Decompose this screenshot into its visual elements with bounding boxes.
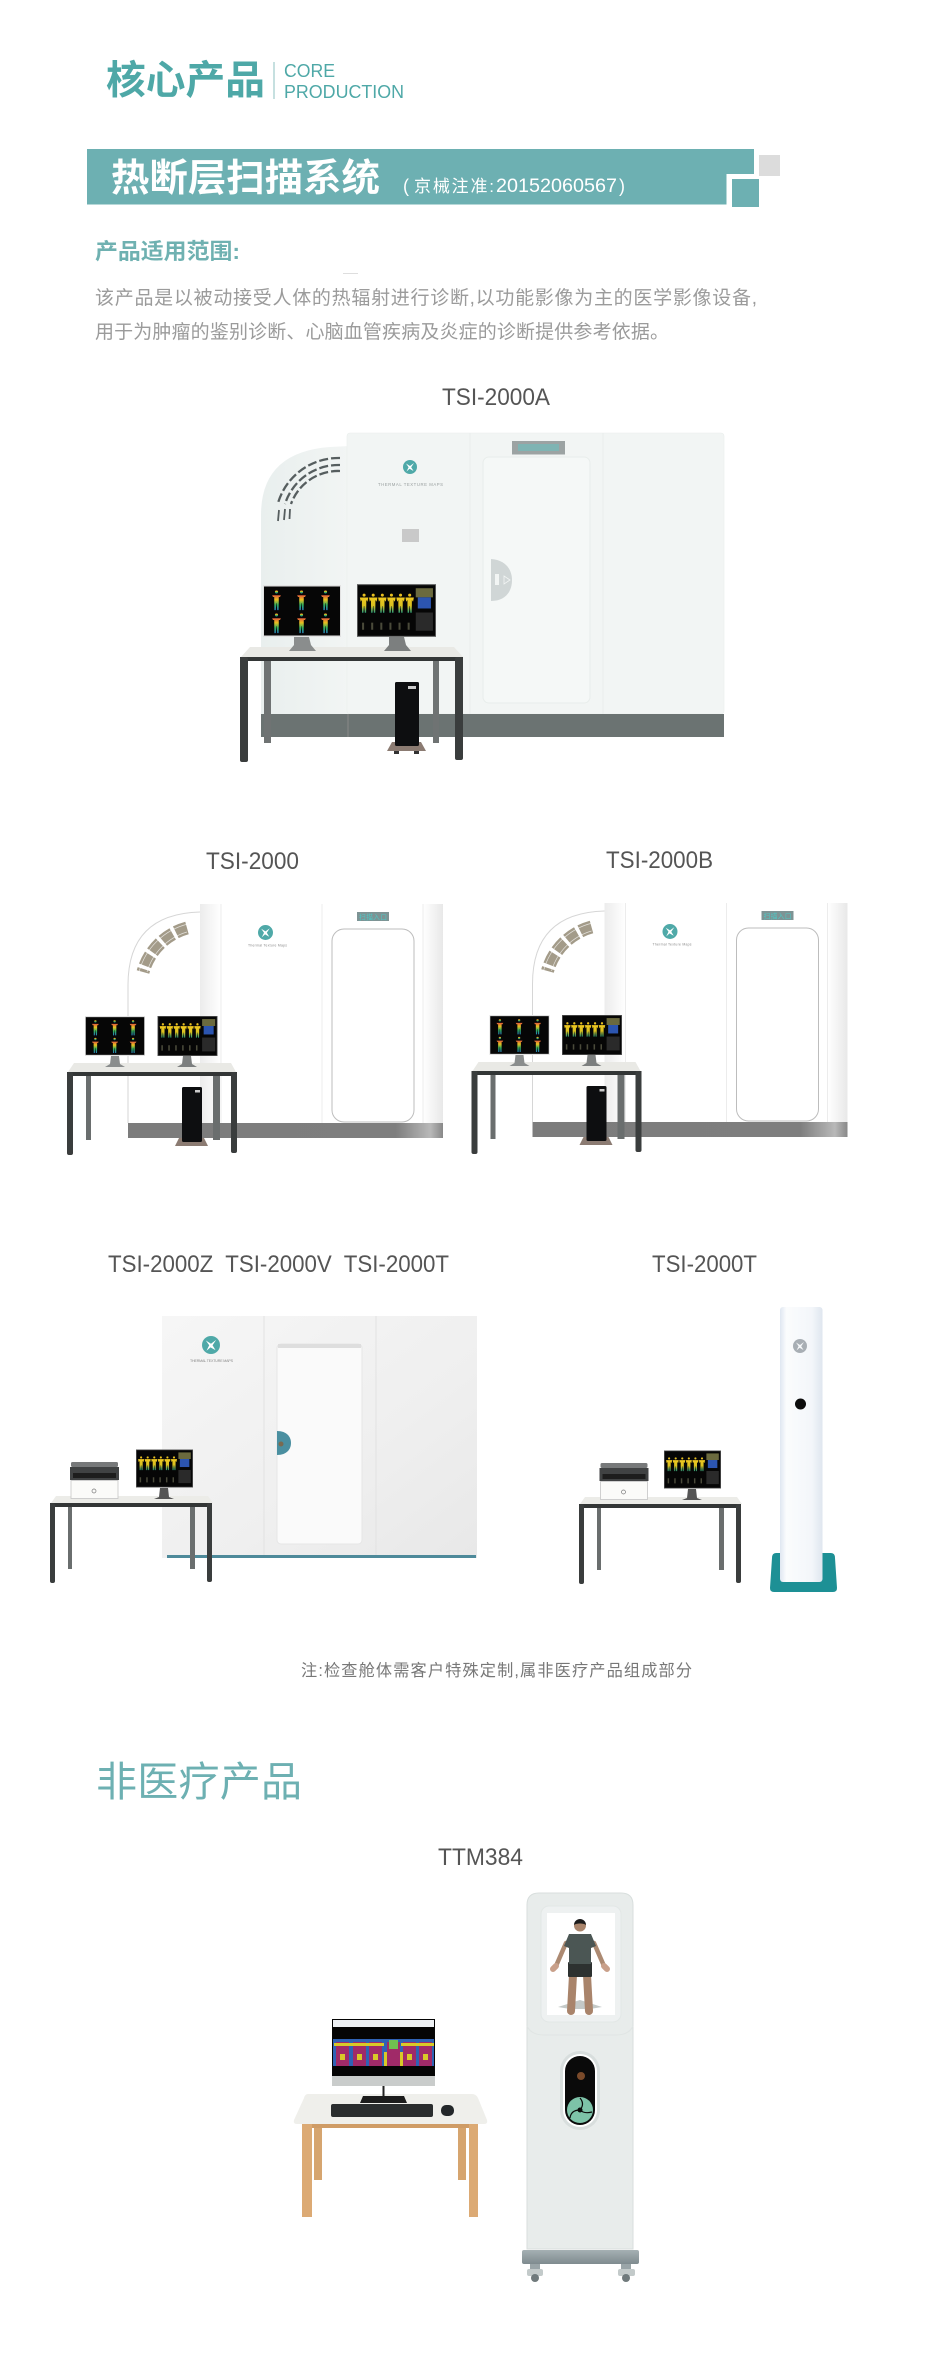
table — [50, 1496, 213, 1583]
cabin and workstation: 扫描入口 — [764, 912, 792, 920]
printer — [600, 1463, 648, 1500]
header: core production — [106, 59, 404, 103]
section: scope of application — [95, 239, 757, 343]
product: TSI-2000A — [240, 384, 724, 762]
registration number: 20152060567 — [496, 176, 617, 197]
cabin — [128, 904, 443, 1138]
label: TTM384: TTM384 — [438, 1844, 523, 1871]
wheels — [527, 2264, 635, 2282]
monitor right — [158, 1016, 218, 1067]
cabin body — [347, 433, 724, 714]
vents — [278, 458, 340, 504]
product: TSI-2000T column — [579, 1251, 837, 1592]
cabin — [162, 1316, 477, 1558]
kiosk scanner window — [560, 2051, 600, 2130]
label: TSI-2000A: TSI-2000A — [442, 384, 550, 411]
cabin and workstation — [472, 903, 848, 1154]
scope heading: 产品适用范围: — [95, 239, 240, 264]
workstation tower — [387, 682, 426, 754]
registration number: ) — [619, 176, 625, 196]
kiosk body — [527, 1893, 633, 2249]
kiosk screen with figure — [547, 1913, 615, 2015]
label: three models: TSI-2000Z TSI-2000V TSI-2000T — [108, 1251, 449, 1278]
label: TSI-2000T: TSI-2000T — [652, 1251, 757, 1278]
workstation tower — [175, 1087, 208, 1146]
label: TSI-2000: TSI-2000 — [206, 848, 299, 875]
scope paragraph: 用于为肿瘤的鉴别诊断、心脑血管疾病及炎症的诊断提供参考依据。 — [95, 321, 669, 343]
sign — [357, 912, 389, 922]
monitor — [664, 1450, 721, 1500]
monitor left — [263, 585, 341, 651]
kiosk base — [522, 2250, 639, 2264]
banner title: 热断层扫描系统 — [111, 158, 380, 200]
mouse — [441, 2105, 454, 2116]
logo — [248, 925, 287, 948]
product: TSI-2000 — [67, 848, 443, 1155]
desktop monitor — [332, 2019, 435, 2103]
registration number: ( — [403, 176, 409, 196]
printer — [70, 1462, 119, 1498]
kiosk — [522, 1893, 639, 2282]
note: 注:检查舱体需客户特殊定制,属非医疗产品组成部分 — [301, 1662, 692, 1680]
scan column — [770, 1307, 837, 1592]
door — [483, 457, 590, 703]
table — [579, 1497, 742, 1584]
scope paragraph: 该产品是以被动接受人体的热辐射进行诊断,以功能影像为主的医学影像设备, — [95, 287, 757, 309]
logo: THERMAL TEXTURE MAPS — [190, 1359, 234, 1363]
logo: Thermal Texture Maps — [248, 944, 287, 948]
table — [240, 647, 463, 762]
heading: CORE PRODUCTION: PRODUCTION — [284, 82, 404, 102]
monitor — [136, 1450, 193, 1499]
heading: non-medical products: 非医疗产品 — [96, 1759, 302, 1805]
registration number: 京械注准: — [414, 177, 494, 196]
logo: THERMAL TEXTURE MAPS — [378, 482, 443, 487]
cabin and workstation: Thermal Texture Maps — [652, 942, 692, 946]
logo — [378, 460, 443, 487]
monitor left — [85, 1016, 145, 1067]
product: TSI-2000B — [472, 847, 848, 1154]
keyboard — [331, 2104, 433, 2117]
cabin arch — [261, 446, 350, 737]
vents — [139, 924, 188, 972]
product: TTM384 — [294, 1844, 639, 2282]
logo — [190, 1336, 234, 1363]
door sign — [512, 441, 565, 454]
desk — [294, 2094, 487, 2217]
door handle — [491, 559, 512, 601]
heading: CORE PRODUCTION: CORE — [284, 61, 335, 81]
monitor right — [357, 584, 436, 651]
sign: 扫描入口 — [359, 912, 387, 922]
heading: 核心产品: 核心产品 — [106, 59, 265, 103]
banner: thermal tomography system — [87, 149, 780, 207]
label: TSI-2000B: TSI-2000B — [606, 847, 713, 874]
table — [67, 1063, 237, 1155]
product: TSI-2000Z / V / T cabin — [50, 1251, 477, 1583]
